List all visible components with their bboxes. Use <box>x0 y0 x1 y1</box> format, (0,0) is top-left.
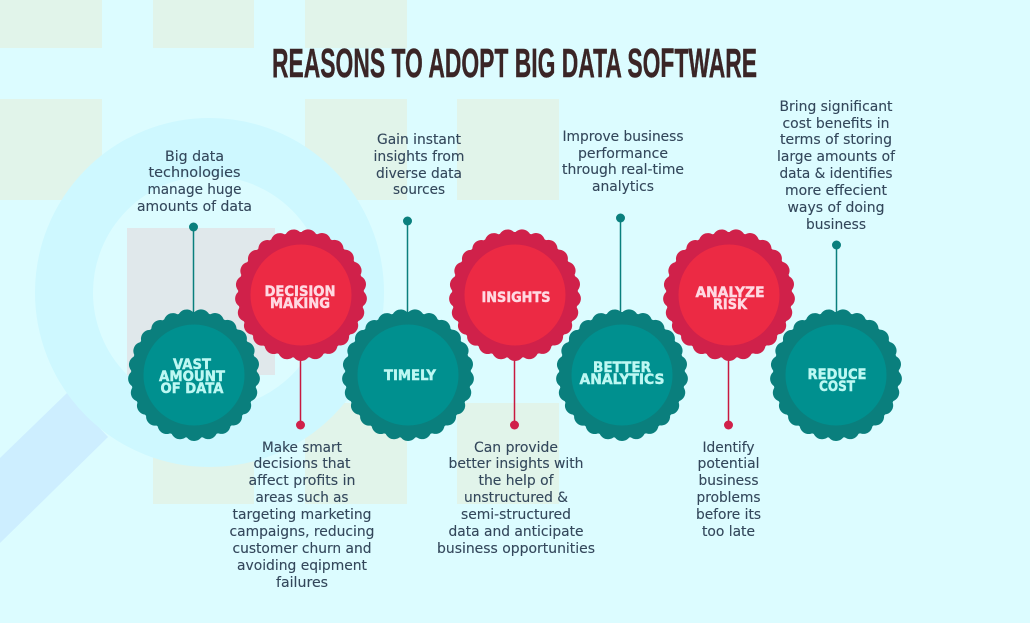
text: insights description: better insights with <box>448 456 584 472</box>
badge: vast amount of data: VAST <box>173 357 212 373</box>
badge: decision making <box>237 231 365 359</box>
text: decision making description: failures <box>276 575 328 591</box>
text: timely description: Gain instant <box>377 132 461 148</box>
text: insights description: the help of <box>478 473 555 489</box>
text: analyze risk description <box>696 440 761 540</box>
connector: analyze risk <box>724 355 733 430</box>
text: decision making description: areas such as <box>256 490 348 506</box>
text: timely description: insights from <box>374 149 464 165</box>
background pattern squares <box>0 0 559 504</box>
text: reduce cost description: ways of doing <box>788 200 884 216</box>
text: reduce cost description: business <box>806 217 866 233</box>
text: vast amount of data description <box>137 149 252 215</box>
text: better analytics description: analytics <box>592 179 654 195</box>
badge: vast amount of data: OF DATA <box>160 381 224 397</box>
badge: reduce cost: REDUCE <box>808 367 866 383</box>
text: insights description: semi-structured <box>461 507 571 523</box>
badge: better analytics: BETTER <box>593 360 651 376</box>
text: decision making description: decisions that <box>254 456 351 472</box>
text: analyze risk description: problems <box>696 490 760 506</box>
badge: decision making: DECISION <box>264 284 336 300</box>
text: better analytics description: performance <box>578 146 668 162</box>
badge: analyze risk: RISK <box>713 297 748 313</box>
connector: better analytics <box>616 214 625 315</box>
badge: analyze risk: ANALYZE <box>696 285 764 301</box>
text: timely description: sources <box>393 182 445 198</box>
text: decision making description: avoiding eqipment <box>237 558 367 574</box>
text: analyze risk description: potential <box>698 456 760 472</box>
badge: insights <box>451 231 579 359</box>
text: better analytics description: Improve business <box>562 129 684 145</box>
text: better analytics description: through real-time <box>562 162 684 178</box>
badge: decision making: MAKING <box>270 296 330 312</box>
text: decision making description: affect profits in <box>248 473 356 489</box>
connector: decision making <box>296 355 305 430</box>
text: better analytics description <box>562 129 684 195</box>
text: decision making description: customer churn and <box>232 541 372 557</box>
badge: vast amount of data <box>130 311 258 439</box>
text: decision making description: targeting marketing <box>232 507 372 523</box>
text: decision making description <box>230 440 374 591</box>
text: insights description: business opportunities <box>437 541 595 557</box>
text: reduce cost description: large amounts of <box>777 149 896 165</box>
connector: timely <box>403 216 412 315</box>
text: insights description <box>437 440 595 557</box>
text: reduce cost description: data & identifies <box>780 166 892 182</box>
badge: better analytics <box>558 311 686 439</box>
text: vast amount of data description: amounts of data <box>137 199 252 215</box>
badge: reduce cost <box>772 311 900 439</box>
magnifier watermark <box>0 147 355 543</box>
badge: timely: TIMELY <box>384 368 437 384</box>
badge: vast amount of data: AMOUNT <box>159 369 226 385</box>
text: analyze risk description: too late <box>702 524 755 540</box>
text: reduce cost description <box>777 99 896 233</box>
connector: reduce cost <box>832 240 841 315</box>
text: decision making description: Make smart <box>262 440 342 456</box>
text: timely description <box>374 132 464 198</box>
text: reduce cost description: more effecient <box>785 183 888 199</box>
text: analyze risk description: before its <box>696 507 761 523</box>
badge: reduce cost: COST <box>819 379 856 395</box>
text: vast amount of data description: technologies <box>148 165 240 181</box>
badge: better analytics: ANALYTICS <box>580 372 664 388</box>
text: insights description: unstructured & <box>464 490 568 506</box>
text: insights description: data and anticipate <box>448 524 584 540</box>
badge: timely <box>344 311 472 439</box>
text: analyze risk description: Identify <box>702 440 754 456</box>
text: vast amount of data description: manage huge <box>148 182 242 198</box>
text: reduce cost description: terms of storing <box>780 132 892 148</box>
connector: insights <box>510 355 519 430</box>
badge: analyze risk <box>665 231 793 359</box>
text: timely description: diverse data <box>376 166 462 182</box>
text: vast amount of data description: Big data <box>165 149 224 165</box>
text: reduce cost description: cost benefits in <box>782 116 890 132</box>
text: insights description: Can provide <box>474 440 558 456</box>
text: reduce cost description: Bring significant <box>780 99 893 115</box>
text: decision making description: campaigns, reducing <box>230 524 374 540</box>
connector: vast amount of data <box>189 222 198 315</box>
text: analyze risk description: business <box>698 473 758 489</box>
badge: insights: INSIGHTS <box>482 290 550 306</box>
